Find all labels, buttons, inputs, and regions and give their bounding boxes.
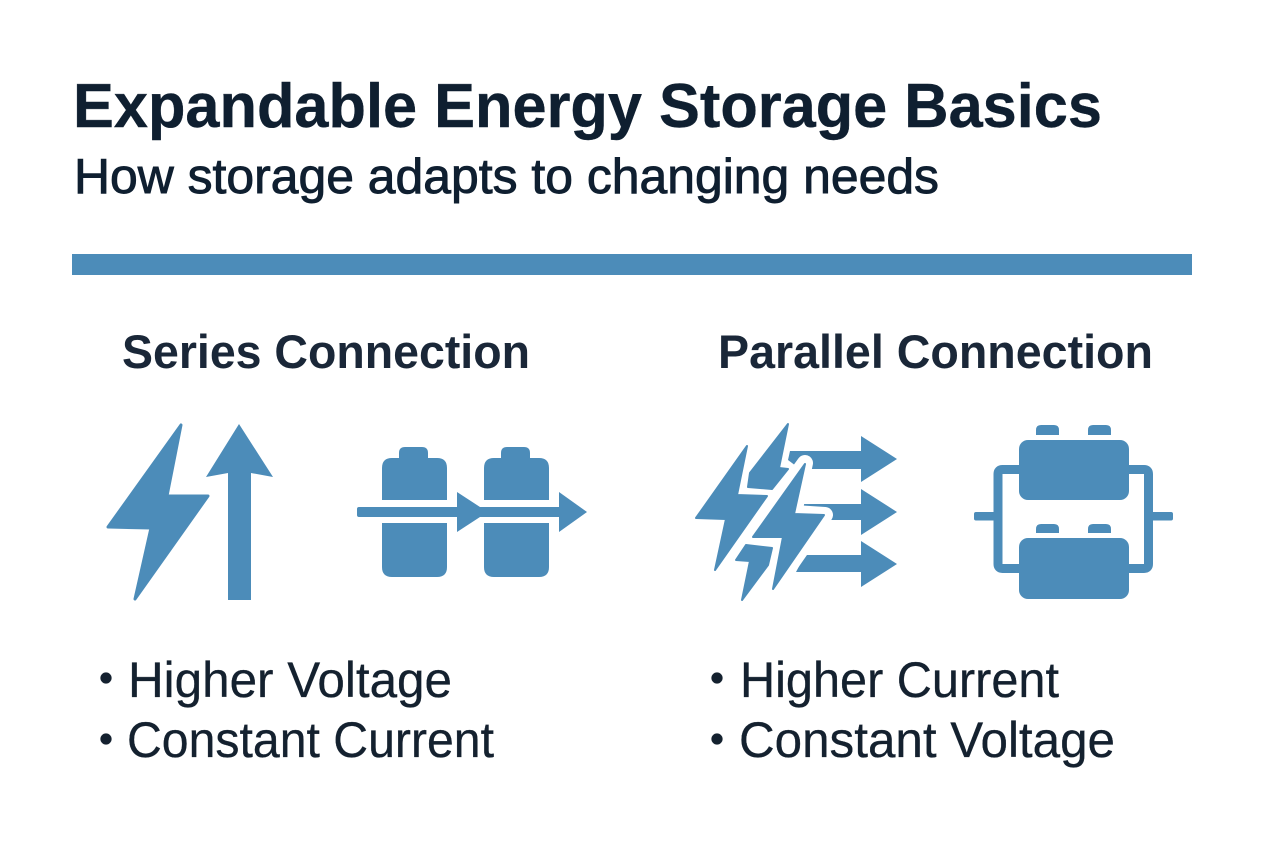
bullet list: series: Higher Voltage (128, 652, 452, 708)
icon: batteries in series with arrows (357, 447, 587, 577)
subtitle: How storage adapts to changing needs (74, 150, 939, 204)
icon: lightning bolt with up arrow (108, 424, 273, 600)
bullet list: series (100, 652, 494, 768)
panel: parallel connection (696, 325, 1173, 768)
bullet list: parallel: Constant Voltage (739, 712, 1115, 768)
bullet list: parallel (712, 652, 1115, 768)
icon: multiple bolts with arrows (696, 424, 897, 600)
icon: batteries in parallel circuit (974, 425, 1173, 599)
heading: series connection: Series Connection (122, 325, 530, 378)
bullet list: series: Constant Current (127, 712, 494, 768)
bullet list: parallel: Higher Current (740, 652, 1059, 708)
heading: parallel connection: Parallel Connection (718, 325, 1153, 378)
header divider bar (72, 254, 1192, 275)
title: Expandable Energy Storage Basics (73, 72, 1102, 141)
panel: series connection (100, 325, 587, 768)
